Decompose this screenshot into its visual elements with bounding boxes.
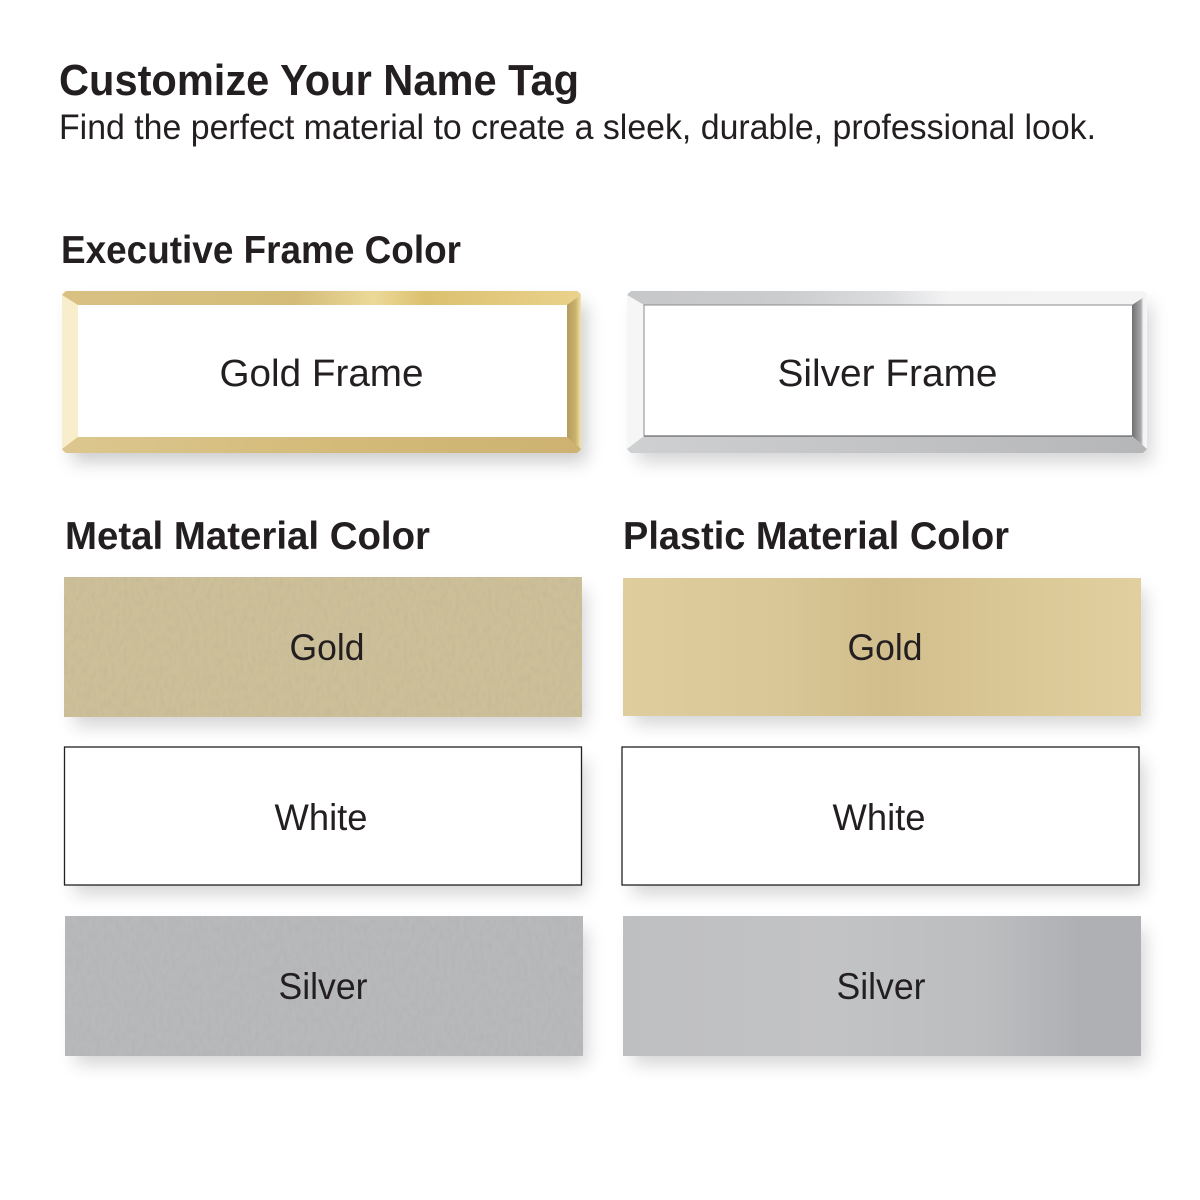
plastic silver swatch: Silver xyxy=(836,966,926,1007)
gold frame tag xyxy=(62,291,586,462)
gold frame tag: Gold Frame xyxy=(220,353,424,395)
heading: plastic material color: Plastic Material Color xyxy=(623,515,1009,558)
plastic gold swatch: Gold xyxy=(848,627,922,668)
silver frame tag xyxy=(627,291,1151,462)
heading: executive frame color: Executive Frame Color xyxy=(61,229,461,272)
plastic white swatch: White xyxy=(832,797,926,838)
metal white swatch: White xyxy=(274,797,368,838)
plastic white swatch xyxy=(622,747,1144,894)
heading: metal material color: Metal Material Color xyxy=(65,515,430,558)
metal silver swatch xyxy=(65,916,587,1064)
title: Customize Your Name Tag xyxy=(59,56,579,105)
metal gold swatch xyxy=(64,577,586,726)
silver frame tag: Silver Frame xyxy=(778,353,998,395)
plastic gold swatch xyxy=(623,578,1145,724)
plastic silver swatch xyxy=(623,916,1145,1064)
subtitle: Find the perfect material to create a sleek, durable, professional look. xyxy=(59,108,1096,147)
metal silver swatch: Silver xyxy=(278,966,368,1007)
metal gold swatch: Gold xyxy=(290,627,364,668)
metal white swatch xyxy=(64,747,586,894)
